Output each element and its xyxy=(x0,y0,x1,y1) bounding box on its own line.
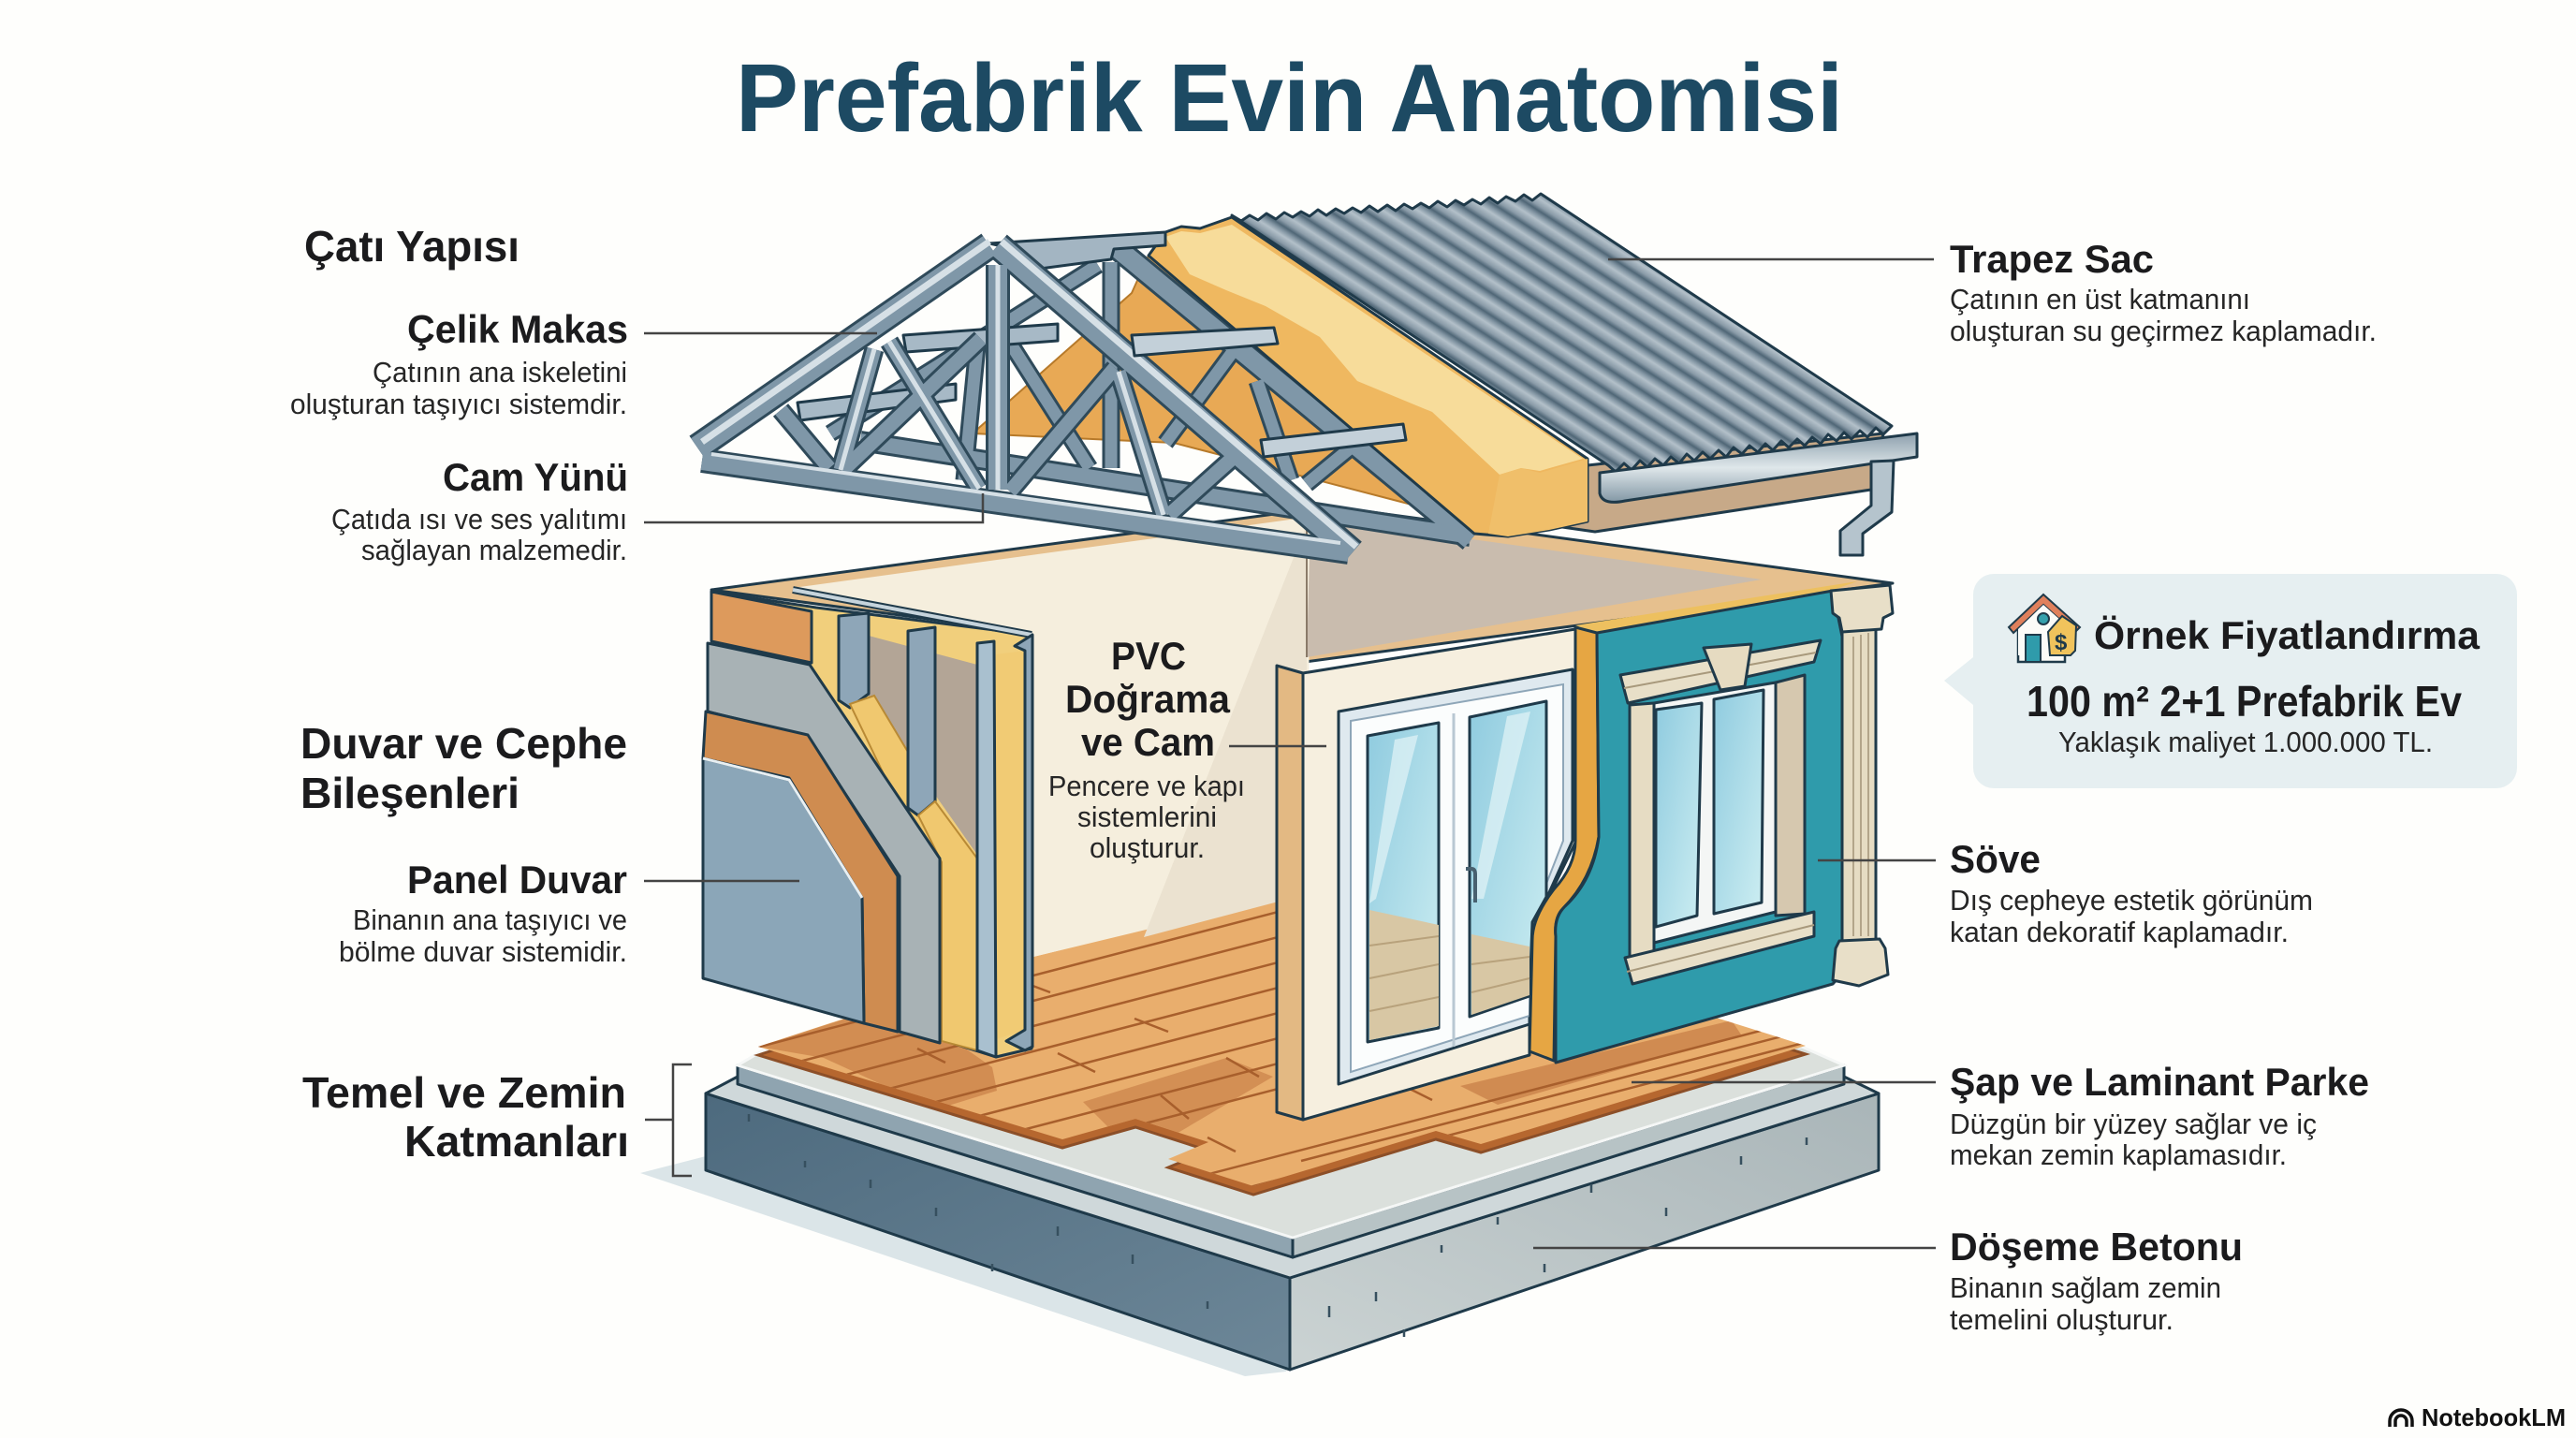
ridge connector xyxy=(989,232,1165,269)
panel wall: steel stud 2 xyxy=(908,627,935,815)
roof assembly xyxy=(697,194,1917,555)
front wall with door xyxy=(1277,629,1575,1120)
PVC door frame xyxy=(1339,669,1573,1084)
label: PVC Doğrama ve Cam: Pencere ve kapı xyxy=(1048,770,1245,802)
callout: Örnek Fiyatlandırma xyxy=(1944,574,2517,788)
leader line: Cam Yünü xyxy=(644,493,983,522)
purlin bars, front xyxy=(1132,328,1278,356)
section heading: Duvar ve Cephe Bileşenleri: Bileşenleri xyxy=(300,769,520,817)
panel wall: layered section xyxy=(703,590,1032,1057)
label: Döşeme Betonu: temelini oluşturur. xyxy=(1950,1303,2174,1336)
label: Cam Yünü: Çatıda ısı ve ses yalıtımı xyxy=(331,503,627,536)
column base xyxy=(1833,939,1888,986)
window glass right xyxy=(1714,690,1764,914)
panel wall: orange top layer xyxy=(711,592,812,663)
label: Şap ve Laminant Parke: Düzgün bir yüzey sağlar ve iç xyxy=(1950,1108,2317,1140)
foundation: döşeme betonu xyxy=(640,1077,1879,1376)
label: Söve: katan dekoratif kaplamadır. xyxy=(1950,916,2289,948)
purlin bars, rear xyxy=(903,324,1058,352)
cream front panel xyxy=(1303,629,1575,1120)
window sill xyxy=(1625,912,1814,984)
label: Trapez Sac xyxy=(1950,237,2377,347)
label: PVC Doğrama ve Cam: sistemlerini xyxy=(1077,800,1217,833)
label: Söve: Dış cepheye estetik görünüm xyxy=(1950,884,2313,917)
gutter xyxy=(1600,433,1917,502)
label: Döşeme Betonu: Binanın sağlam zemin xyxy=(1950,1271,2221,1304)
downspout xyxy=(1840,461,1894,555)
panel wall: insulation upper block xyxy=(850,696,942,862)
label: Cam Yünü: Cam Yünü xyxy=(443,455,628,499)
column capital xyxy=(1831,585,1893,632)
callout: Örnek Fiyatlandırma: Yaklaşık maliyet 1.000.000 TL. xyxy=(2058,726,2433,758)
column shaft xyxy=(1842,627,1876,947)
bracket: Temel ve Zemin xyxy=(645,1064,692,1176)
glass wool cut face xyxy=(1488,459,1588,536)
label: Panel Duvar: Binanın ana taşıyıcı ve xyxy=(353,903,627,936)
interior back walls xyxy=(711,506,1893,957)
label: Trapez Sac: Trapez Sac xyxy=(1950,237,2154,281)
window left pillar xyxy=(1630,703,1654,958)
glass wool lighter top xyxy=(1165,225,1583,475)
section heading: Duvar ve Cephe Bileşenleri: Duvar ve Cephe xyxy=(300,719,627,768)
panel wall: steel stud 3 xyxy=(977,641,996,1057)
cornice keystone xyxy=(1704,644,1751,690)
panel wall: steel channel end xyxy=(1006,635,1032,1050)
section heading: Temel ve Zemin Katmanları: Katmanları xyxy=(404,1117,629,1166)
söve facade: teal panel and mouldings xyxy=(1530,581,1893,1063)
panel wall: insulation lower block xyxy=(918,801,977,1050)
label: Trapez Sac: oluşturan su geçirmez kaplamadır. xyxy=(1950,315,2377,347)
panel wall: top steel strip xyxy=(793,590,1032,635)
orange insulation edge xyxy=(1530,627,1599,1061)
label: Söve xyxy=(1950,837,2313,948)
leader line: Çelik Makas xyxy=(644,332,877,334)
panel wall: inner taupe board xyxy=(869,636,977,855)
label: Trapez Sac: Çatının en üst katmanını xyxy=(1950,283,2250,315)
label: Çelik Makas: Çatının ana iskeletini xyxy=(373,356,627,389)
corrugated trapez sac xyxy=(1232,194,1892,472)
label: Çelik Makas: oluşturan taşıyıcı sistemdir. xyxy=(290,388,627,420)
label: Döşeme Betonu xyxy=(1950,1225,2243,1336)
label: Panel Duvar: Panel Duvar xyxy=(407,858,627,902)
fascia board xyxy=(1562,433,1883,532)
door glass left xyxy=(1368,723,1439,1042)
section heading: Temel ve Zemin Katmanları: Temel ve Zemin xyxy=(302,1068,626,1117)
label: PVC Doğrama ve Cam: oluşturur. xyxy=(1090,831,1205,864)
leader line: Panel Duvar xyxy=(644,880,799,882)
label: PVC Doğrama ve Cam: ve Cam xyxy=(1081,720,1215,764)
label: PVC Doğrama ve Cam: PVC xyxy=(1111,634,1186,678)
panel wall: steel stud 1 xyxy=(839,613,869,708)
window white frame xyxy=(1654,682,1776,943)
door glass right xyxy=(1470,701,1546,1017)
label: Şap ve Laminant Parke: Şap ve Laminant Parke xyxy=(1950,1060,2369,1104)
label: Söve: Söve xyxy=(1950,837,2041,881)
label: Cam Yünü: sağlayan malzemedir. xyxy=(361,534,627,566)
label: PVC Doğrama ve Cam: Doğrama xyxy=(1065,677,1231,721)
panel wall: concrete board xyxy=(708,643,940,1043)
label: PVC Doğrama ve Cam xyxy=(1048,634,1245,864)
yellow strip on wall top xyxy=(1575,581,1857,633)
back truss xyxy=(830,246,1471,540)
label: Cam Yünü xyxy=(331,455,628,566)
panel wall: insulation backing and rail xyxy=(711,592,1032,1057)
roof underside insulation xyxy=(973,256,1474,534)
panel wall: blue outer board xyxy=(703,758,864,1023)
door handle xyxy=(1466,869,1475,902)
section heading: Çatı Yapısı: Çatı Yapısı xyxy=(304,222,520,271)
front truss xyxy=(697,242,1356,552)
leader line: Trapez Sac xyxy=(1608,258,1934,260)
label: Panel Duvar: bölme duvar sistemidir. xyxy=(339,935,627,968)
leader line: Şap ve Laminant Parke xyxy=(1632,1081,1936,1083)
callout: Örnek Fiyatlandırma: Örnek Fiyatlandırma xyxy=(2094,613,2481,657)
section heading: Duvar ve Cephe Bileşenleri xyxy=(300,719,627,817)
leader line: Döşeme Betonu xyxy=(1533,1247,1936,1249)
glass wool layer xyxy=(1149,217,1588,536)
label: Döşeme Betonu: Döşeme Betonu xyxy=(1950,1225,2243,1269)
label: Çelik Makas: Çelik Makas xyxy=(407,307,628,351)
panel wall: OSB layer xyxy=(703,712,898,1032)
leader line: PVC Doğrama ve Cam xyxy=(1229,745,1326,747)
label: Şap ve Laminant Parke: mekan zemin kaplamasıdır. xyxy=(1950,1138,2287,1171)
wood edge of front wall xyxy=(1277,666,1303,1120)
icon: house with price tag xyxy=(2009,594,2080,662)
window right pillar xyxy=(1776,675,1805,916)
icon: house with price tag: $ xyxy=(2055,630,2068,655)
label: Panel Duvar xyxy=(339,858,627,968)
panel wall: insulation right layer xyxy=(996,651,1025,1039)
brand mark: NotebookLM: NotebookLM xyxy=(2422,1403,2566,1431)
callout: Örnek Fiyatlandırma: 100 m² 2+1 Prefabrik Ev xyxy=(2027,677,2462,726)
section heading: Temel ve Zemin Katmanları xyxy=(302,1068,629,1166)
window cornice xyxy=(1620,640,1821,703)
label: Şap ve Laminant Parke xyxy=(1950,1060,2369,1171)
label: Çelik Makas xyxy=(290,307,628,420)
leader line: Söve xyxy=(1818,859,1936,861)
callout box with pointer xyxy=(1944,574,2517,788)
slab: şap katmanı xyxy=(738,1047,1844,1257)
window glass left xyxy=(1656,703,1702,927)
title: Prefabrik Evin Anatomisi xyxy=(736,44,1843,152)
teal facade panel xyxy=(1556,591,1842,1063)
laminant parke floor xyxy=(749,889,1825,1203)
